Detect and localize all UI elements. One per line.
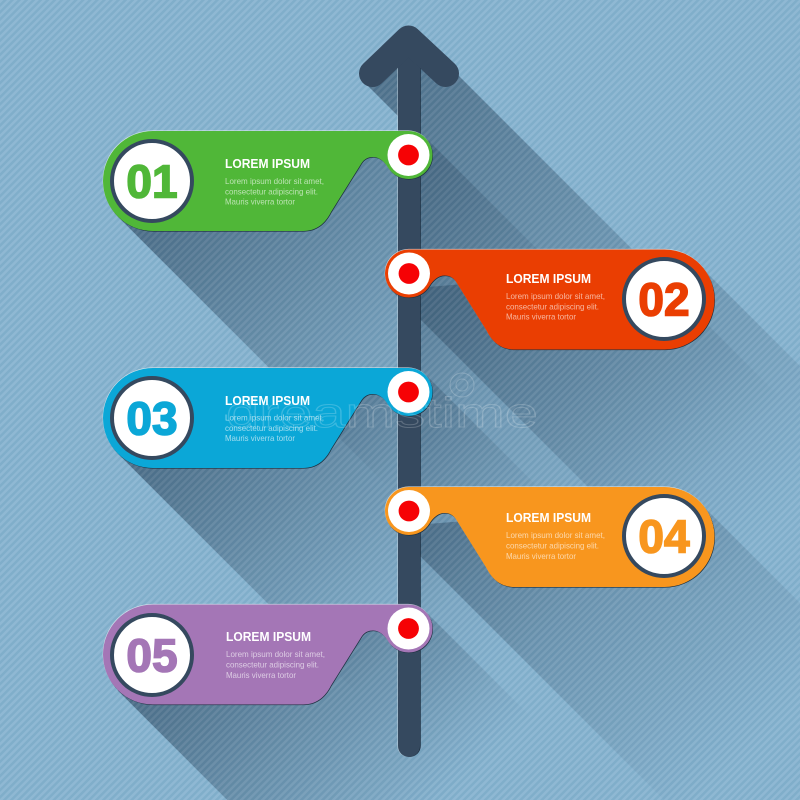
marker dot 02 xyxy=(388,252,430,294)
text 04: Mauris viverra tortor xyxy=(506,551,576,561)
number badge 02: 02 xyxy=(638,274,690,326)
text 04: LOREM IPSUM xyxy=(506,510,591,525)
text 02: consectetur adipiscing elit. xyxy=(506,302,599,312)
number badge 05: 05 xyxy=(126,630,178,682)
shadow: arrow xyxy=(364,60,800,800)
text 02: LOREM IPSUM xyxy=(506,271,591,286)
number badge 02 xyxy=(624,259,704,339)
text 01: Lorem ipsum dolor sit amet, xyxy=(225,176,324,186)
watermark: dreamstime xyxy=(226,389,538,436)
text 02: Mauris viverra tortor xyxy=(506,312,576,322)
panel: 02 xyxy=(385,249,715,350)
panel: 01 xyxy=(103,130,433,232)
panel: 03 xyxy=(103,367,433,469)
text 05 xyxy=(226,629,325,680)
text 01: LOREM IPSUM xyxy=(225,156,310,171)
number badge 01 xyxy=(112,141,192,221)
arrow xyxy=(372,39,446,757)
shadow: panel 04 xyxy=(391,502,800,800)
text 01: Mauris viverra tortor xyxy=(225,196,295,206)
shadow: panel 03 xyxy=(118,374,800,800)
number badge 01: 01 xyxy=(126,156,178,208)
marker dot 01 xyxy=(388,134,430,176)
number badge 04 xyxy=(624,496,704,576)
text 05: consectetur adipiscing elit. xyxy=(226,660,319,670)
number badge 05 xyxy=(112,615,192,695)
text 04 xyxy=(506,510,605,561)
text 05: Lorem ipsum dolor sit amet, xyxy=(226,649,325,659)
text 01 xyxy=(225,156,324,206)
number badge 03: 03 xyxy=(126,392,178,444)
text 04: Lorem ipsum dolor sit amet, xyxy=(506,530,605,540)
text 02: Lorem ipsum dolor sit amet, xyxy=(506,291,605,301)
number badge 03 xyxy=(112,378,192,458)
long shadows xyxy=(118,60,800,800)
text 05: LOREM IPSUM xyxy=(226,629,311,644)
text 05: Mauris viverra tortor xyxy=(226,670,296,680)
shadow: panel 02 xyxy=(391,265,800,699)
text 04: consectetur adipiscing elit. xyxy=(506,540,599,550)
text 03 xyxy=(225,393,324,443)
shadow: panel 05 xyxy=(118,611,614,800)
text 03: Lorem ipsum dolor sit amet, xyxy=(225,412,324,422)
shadow: panel 01 xyxy=(118,137,800,800)
panel: 05 xyxy=(103,604,433,705)
panel: 04 xyxy=(385,486,715,588)
marker dot 05 xyxy=(388,608,430,650)
text 02 xyxy=(506,271,605,322)
marker dot 04 xyxy=(388,490,430,532)
watermark xyxy=(226,373,538,436)
text 03: LOREM IPSUM xyxy=(225,393,310,408)
text 03: Mauris viverra tortor xyxy=(225,433,295,443)
number badge 04: 04 xyxy=(638,510,690,562)
marker dot 03 xyxy=(388,371,430,413)
text 03: consectetur adipiscing elit. xyxy=(225,423,318,433)
text 01: consectetur adipiscing elit. xyxy=(225,186,318,196)
